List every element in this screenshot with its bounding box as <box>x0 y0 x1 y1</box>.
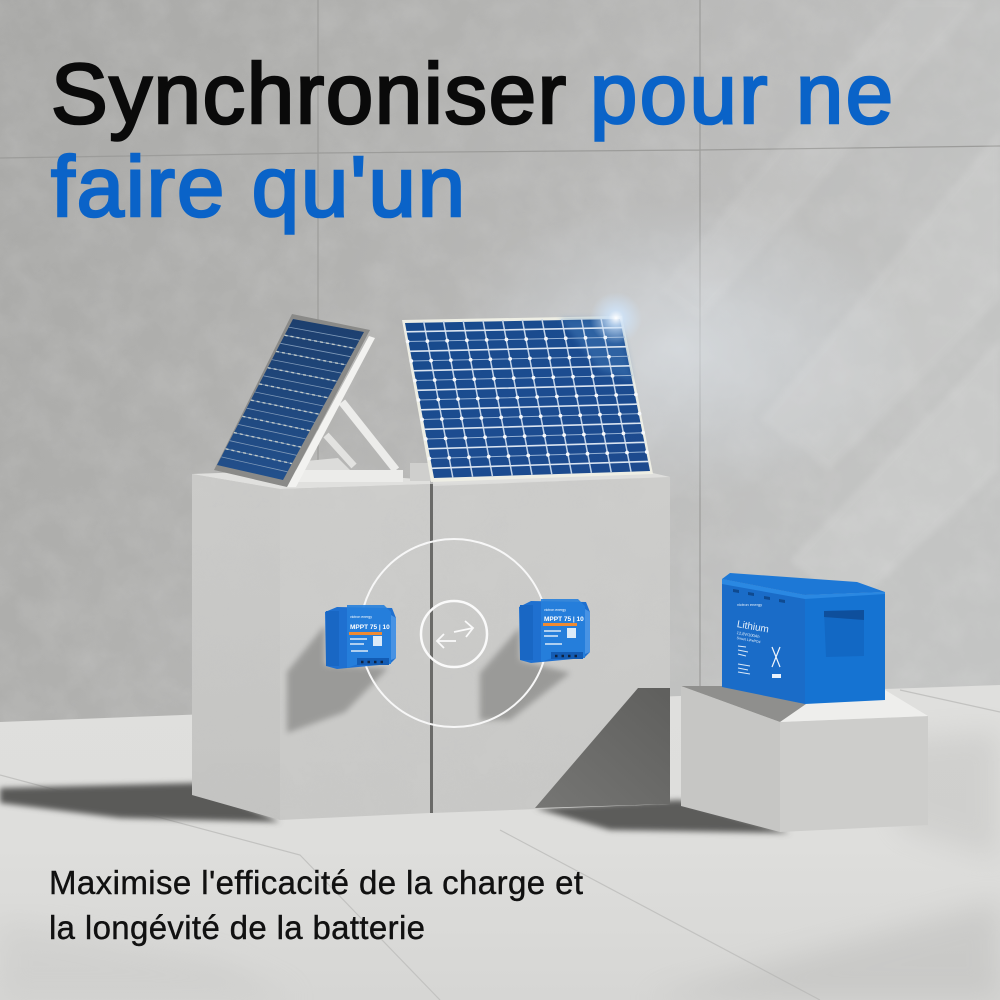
battery label: 12,8V/100Ah <box>736 630 760 639</box>
block: left pedestal <box>192 470 430 820</box>
controller: left <box>325 605 396 669</box>
title: faire qu'un <box>51 140 465 235</box>
controller: right: MPPT 75 | 10 <box>544 616 584 623</box>
battery label: Smart LiFePO4 <box>736 636 761 644</box>
sync ring: outer circle <box>360 539 548 727</box>
solar panel: left, tilted <box>214 314 403 487</box>
battery label <box>736 602 781 678</box>
battery label: victron energy <box>737 602 762 607</box>
block: battery pedestal <box>681 686 928 832</box>
controller: right: victron energy <box>544 608 566 612</box>
subtitle text: Maximise l'efficacité de la charge et <box>49 864 583 901</box>
background: concrete wall <box>0 0 1000 730</box>
controller: left: victron energy <box>350 615 372 619</box>
sync icon: circle with two arrows <box>421 601 487 667</box>
title <box>51 47 893 235</box>
battery: lithium <box>722 573 885 704</box>
subtitle text <box>49 864 583 946</box>
battery label: Lithium <box>736 619 770 636</box>
battery vent slots <box>733 589 785 603</box>
controller: left: MPPT 75 | 10 <box>350 624 390 631</box>
controller: right <box>519 599 590 663</box>
battery handle recess <box>824 610 864 657</box>
subtitle text: la longévité de la batterie <box>49 909 425 946</box>
shadows behind controllers <box>287 625 570 733</box>
panel foot bracket <box>410 463 436 481</box>
title: Synchroniser <box>51 47 566 142</box>
block: centre pedestal <box>430 473 670 813</box>
background: floor <box>0 685 1000 1000</box>
solar panel: right <box>402 292 653 482</box>
title: pour ne <box>590 47 893 142</box>
panel support bracket <box>298 402 403 482</box>
